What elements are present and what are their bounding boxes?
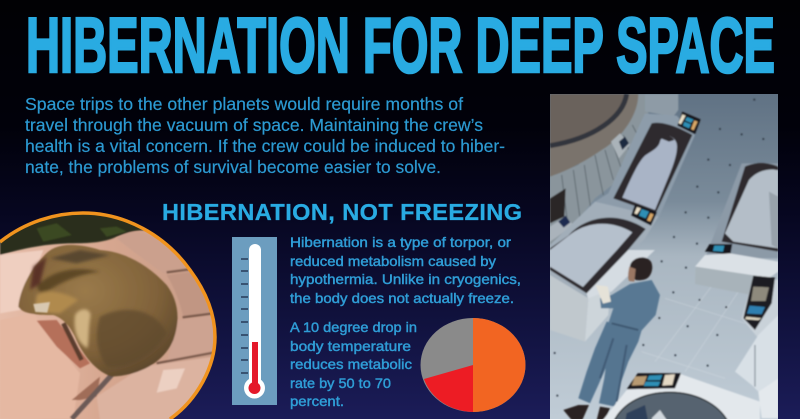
bottom console	[602, 373, 760, 419]
intro text block	[25, 94, 505, 177]
intro text block: travel through the vacuum of space. Maintaining the crew’s	[25, 115, 483, 135]
text block: torpor explanation: reduced metabolism caused by	[290, 253, 496, 269]
pod one	[595, 112, 701, 218]
intro text block: nate, the problems of survival become easier to solve.	[25, 157, 441, 177]
foot	[37, 320, 90, 368]
ribbed wall	[550, 94, 648, 248]
fingers	[116, 230, 140, 246]
pie chart	[420, 318, 526, 412]
astronaut	[563, 257, 660, 419]
dome	[550, 94, 638, 177]
heading: hibernation, not freezing: HIBERNATION, NOT FREEZING	[162, 199, 522, 225]
right control panel	[735, 276, 778, 418]
text block: metabolic rate: body temperature	[290, 338, 411, 354]
text block: metabolic rate: rate by 50 to 70	[290, 375, 391, 391]
photo: hibernating dormouse in a hand	[0, 205, 220, 419]
pod three	[695, 163, 778, 298]
tail	[72, 375, 112, 419]
thermometer icon	[232, 237, 277, 405]
text block: metabolic rate	[290, 319, 417, 409]
foliage	[0, 214, 144, 256]
intro text block: health is a vital concern. If the crew could be induced to hiber-	[25, 136, 505, 156]
text block: metabolic rate: reduces metabolic	[290, 356, 412, 372]
text block: torpor explanation: Hibernation is a type of torpor, or	[290, 234, 511, 250]
text block: torpor explanation: hypothermia. Unlike in cryogenics,	[290, 271, 521, 287]
text block: torpor explanation	[290, 234, 521, 306]
text block: metabolic rate: percent.	[290, 393, 344, 409]
text block: torpor explanation: the body does not actually freeze.	[290, 290, 514, 306]
body	[18, 245, 178, 377]
pod two	[550, 202, 658, 342]
text block: metabolic rate: A 10 degree drop in	[290, 319, 417, 335]
orange ring around photo	[0, 213, 215, 419]
intro text block: Space trips to the other planets would require months of	[25, 94, 463, 114]
photo: astronaut among hibernation pods	[550, 94, 778, 419]
